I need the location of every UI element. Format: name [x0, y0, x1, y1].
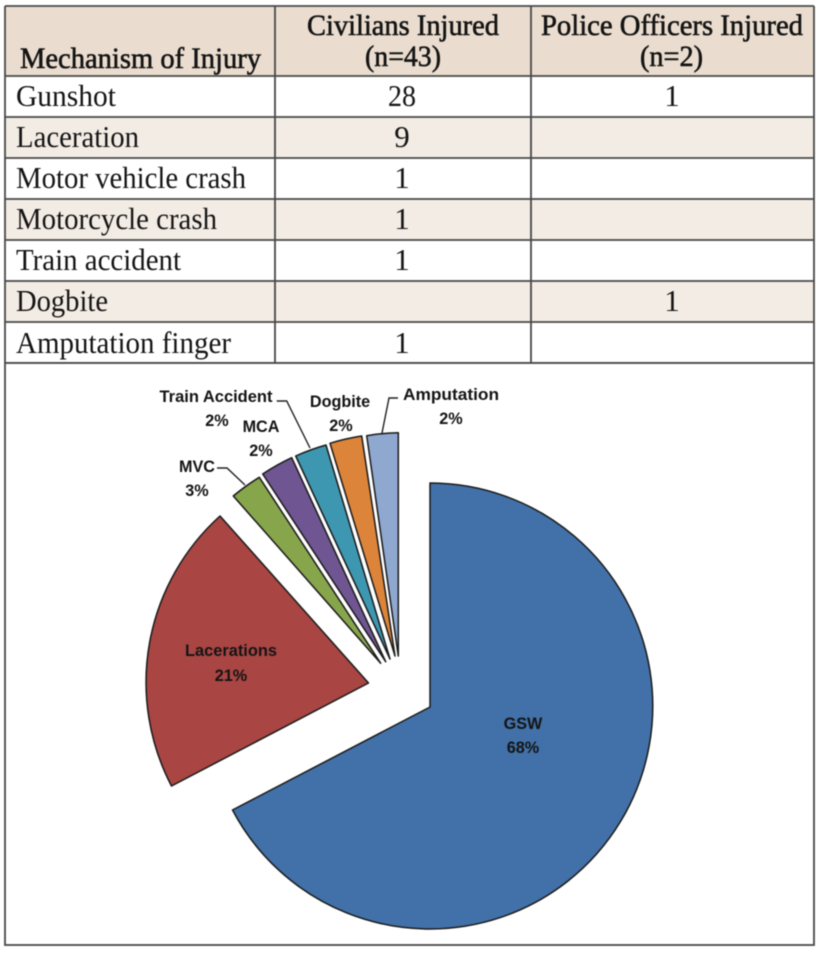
- row: dogbite: Dogbite: [16, 283, 108, 318]
- row: amputation finger: Amputation finger: [16, 325, 232, 360]
- row: dogbite: [16, 283, 680, 318]
- row: gunshot: 1: [664, 78, 680, 113]
- table header row: (n=2): [640, 40, 703, 73]
- row: amputation finger: 1: [394, 325, 410, 360]
- table header row: Civilians Injured: [307, 9, 499, 42]
- label: Lacerations: 21%: [215, 667, 247, 685]
- row: motor vehicle crash: 1: [394, 160, 410, 195]
- label: Dogbite: 2%: [329, 417, 353, 435]
- row: laceration: 9: [394, 119, 410, 154]
- label: MVC with leader: 3%: [185, 482, 209, 500]
- label: Lacerations: [185, 642, 277, 685]
- label: Amputation with leader: 2%: [439, 410, 463, 428]
- row: laceration: [16, 119, 410, 154]
- row: train accident: [16, 242, 410, 277]
- label: Train Accident with leader: Train Accident: [160, 388, 273, 406]
- row: motor vehicle crash: Motor vehicle crash: [16, 160, 246, 195]
- row: motorcycle crash: [16, 201, 410, 236]
- label: MCA: [243, 418, 280, 460]
- slice: lacerations: [146, 516, 368, 786]
- row: train accident: 1: [394, 242, 410, 277]
- label: Dogbite: [310, 393, 370, 435]
- row: gunshot: Gunshot: [16, 78, 116, 113]
- pie chart panel: [5, 363, 814, 945]
- label: MCA: MCA: [243, 418, 280, 436]
- row: motorcycle crash: Motorcycle crash: [16, 201, 217, 236]
- row: train accident: Train accident: [16, 242, 181, 277]
- label: MVC with leader: MVC: [179, 458, 215, 476]
- slice: amputation: [367, 433, 398, 656]
- row: motorcycle crash: 1: [394, 201, 410, 236]
- row: dogbite: 1: [664, 283, 680, 318]
- label: GSW: 68%: [507, 739, 539, 757]
- table header row: [20, 9, 803, 75]
- label: Dogbite: Dogbite: [310, 393, 370, 411]
- label: MCA: 2%: [249, 442, 273, 460]
- label: Amputation with leader: [382, 386, 499, 433]
- label: Lacerations: Lacerations: [185, 642, 277, 660]
- table header row: Mechanism of Injury: [20, 42, 261, 75]
- slice: train accident: [296, 445, 390, 659]
- table header row: (n=43): [365, 40, 441, 73]
- label: Train Accident with leader: 2%: [205, 412, 229, 430]
- slice: MVC: [233, 477, 381, 663]
- slice: dogbite: [330, 436, 395, 656]
- row: laceration: Laceration: [16, 119, 139, 154]
- label: Amputation with leader: Amputation: [403, 386, 499, 404]
- label: MVC with leader: [179, 458, 245, 500]
- table header row: Police Officers Injured: [541, 9, 803, 42]
- row: gunshot: [16, 78, 680, 113]
- label: Train Accident with leader: [160, 388, 310, 448]
- label: GSW: [504, 715, 543, 757]
- label: GSW: GSW: [504, 715, 543, 733]
- slice: GSW: [232, 483, 653, 929]
- row: motor vehicle crash: [16, 160, 410, 195]
- injury mechanism table: [5, 6, 814, 363]
- slice: MCA: [263, 458, 386, 662]
- row: amputation finger: [16, 325, 410, 360]
- row: gunshot: 28: [388, 78, 416, 113]
